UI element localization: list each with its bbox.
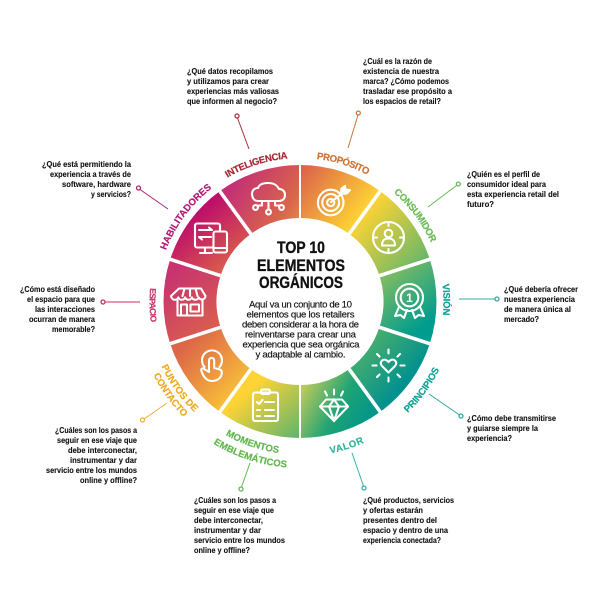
text block: Momentos emblemáticos question: instrumentar y dar: [194, 525, 262, 535]
text block: Consumidor question: esta experiencia retail del: [467, 189, 559, 199]
text block: Consumidor question: futuro?: [467, 199, 494, 209]
text block: center description: [242, 300, 360, 360]
text block: Habilitadores question: software, hardware: [62, 179, 131, 189]
text block: Valor question: presentes dentro del: [363, 515, 437, 525]
segment: Propósito: [300, 165, 380, 234]
text block: Momentos emblemáticos question: seguir en ese viaje que: [194, 505, 274, 515]
connector: Visión: [459, 297, 499, 301]
text block: Puntos de contacto question: online y offline?: [80, 475, 137, 485]
icon: award medal: 1: [406, 291, 413, 305]
panel: organic elements ring: [164, 164, 436, 439]
text block: Puntos de contacto question: debe interconectar,: [68, 445, 137, 455]
text block: Inteligencia question: y utilizamos para crear: [187, 76, 270, 86]
text block: Espacio question: [20, 284, 95, 334]
segment: Espacio: [164, 259, 221, 344]
label: Espacio: ESPACIO: [149, 288, 157, 322]
segment: Habilitadores: [170, 191, 251, 276]
text block: Principios question: [467, 413, 556, 443]
connector: Principios: [429, 394, 463, 418]
heading: center title: TOP 10: [277, 238, 325, 257]
text block: Puntos de contacto question: ¿Cuáles son los pasos a: [55, 425, 137, 435]
text block: Valor question: ¿Qué productos, servicios: [363, 495, 454, 505]
label: Valor: VALOR: [329, 437, 364, 454]
text block: Puntos de contacto question: seguir en ese viaje que: [57, 435, 137, 445]
text block: Propósito question: [363, 56, 452, 106]
text block: Propósito question: los espacios de retail?: [363, 96, 441, 106]
text block: Consumidor question: ¿Quién es el perfil de: [467, 169, 540, 179]
icon: heart with rays: [372, 350, 404, 382]
text block: Visión question: nuestra experiencia: [504, 294, 575, 304]
text block: Espacio question: ¿Cómo está diseñado: [20, 284, 95, 294]
heading: center title: ELEMENTOS: [257, 256, 345, 275]
icon: touch hand: [201, 350, 222, 381]
segment: Inteligencia: [220, 165, 300, 234]
label: Puntos de contacto: CONTACTO: [154, 373, 188, 416]
text block: Visión question: mercado?: [504, 314, 539, 324]
text block: Momentos emblemáticos question: ¿Cuáles son los pasos a: [194, 495, 276, 505]
text block: Habilitadores question: experiencia a través de: [50, 169, 131, 179]
label: Momentos emblemáticos: EMBLEMÁTICOS: [214, 438, 287, 468]
label: Principios: PRINCIPIOS: [403, 367, 438, 413]
text block: Inteligencia question: experiencias más valiosas: [187, 86, 279, 96]
text block: Inteligencia question: [187, 66, 279, 106]
text block: center description: y adaptable al cambio.: [256, 350, 346, 360]
text block: Momentos emblemáticos question: debe interconectar,: [194, 515, 263, 525]
icon: cloud network: [252, 183, 285, 214]
text block: center description: experiencia que sea orgánica: [242, 340, 360, 350]
connector: Momentos emblemáticos: [239, 463, 250, 491]
text block: Consumidor question: [467, 169, 559, 209]
text block: Propósito question: trasladar ese propósito a: [363, 86, 452, 96]
text block: Espacio question: ocurran de manera: [29, 314, 95, 324]
text block: Principios question: ¿Cómo debe transmitirse: [467, 413, 556, 423]
text block: Puntos de contacto question: servicio entre los mundos: [46, 465, 137, 475]
label: Inteligencia: INTELIGENCIA: [224, 152, 288, 178]
text block: Habilitadores question: ¿Qué está permitiendo la: [42, 159, 131, 169]
text block: Valor question: y ofertas estarán: [363, 505, 423, 515]
label: Puntos de contacto: PUNTOS DE: [162, 364, 199, 412]
segment: Momentos emblemáticos: [220, 369, 300, 438]
text block: Puntos de contacto question: [46, 425, 138, 485]
text block: Habilitadores question: y servicios?: [91, 189, 131, 199]
text block: Habilitadores question: [42, 159, 131, 199]
icon: clipboard checklist: [253, 390, 278, 421]
text block: Consumidor question: consumidor ideal para: [467, 179, 546, 189]
icon: connected devices: [195, 224, 227, 253]
text block: center description: deben considerar a la hora de: [242, 320, 359, 330]
text block: Visión question: ¿Qué debería ofrecer: [504, 284, 579, 294]
text block: Principios question: experiencia?: [467, 433, 512, 443]
segment: Principios: [349, 327, 430, 412]
connector: Valor: [352, 453, 366, 490]
text block: Momentos emblemáticos question: online y offline?: [194, 545, 250, 555]
text block: Propósito question: ¿Cuál es la razón de: [363, 56, 432, 66]
text block: Puntos de contacto question: instrumentar y dar: [70, 455, 138, 465]
label: Habilitadores: HABILITADORES: [160, 184, 211, 250]
connector: Habilitadores: [136, 186, 168, 209]
segment: Puntos de contacto: [170, 327, 251, 412]
text block: center description: reinventarse para crear una: [245, 330, 357, 340]
label: Consumidor: CONSUMIDOR: [395, 189, 436, 243]
text block: Valor question: espacio y dentro de una: [363, 525, 448, 535]
text block: center description: elementos que los retailers: [246, 310, 355, 320]
text block: Principios question: y guiarse siempre la: [467, 423, 538, 433]
text block: Inteligencia question: que informen al negocio?: [187, 96, 277, 106]
text block: Valor question: [363, 495, 454, 545]
heading: center title: [257, 238, 345, 292]
text block: Espacio question: memorable?: [52, 324, 95, 334]
text block: Espacio question: las interacciones: [35, 304, 95, 314]
connector: Espacio: [101, 300, 140, 304]
text block: Inteligencia question: ¿Qué datos recopilamos: [187, 66, 273, 76]
text block: Valor question: experiencia conectada?: [363, 535, 441, 545]
text block: Propósito question: marca? ¿Cómo podemos: [363, 76, 449, 86]
heading: center title: ORGÁNICOS: [259, 273, 343, 292]
icon: consumer crosshair: [373, 222, 404, 253]
icon: diamond: [320, 390, 348, 421]
text block: Espacio question: el espacio para que: [27, 294, 95, 304]
connector: Consumidor: [428, 182, 460, 207]
icon: storefront: [171, 288, 206, 316]
connector: Puntos de contacto: [140, 403, 167, 422]
segment: Consumidor: [349, 191, 430, 276]
text block: Momentos emblemáticos question: [194, 495, 285, 555]
text block: Momentos emblemáticos question: servicio entre los mundos: [194, 535, 285, 545]
segment: Valor: [300, 369, 380, 438]
label: Visión: VISIÓN: [442, 283, 452, 316]
icon: award medal: [395, 284, 424, 318]
connector: Propósito: [348, 111, 360, 148]
label: Propósito: PROPÓSITO: [317, 152, 370, 174]
segment: Visión: [379, 259, 436, 344]
text block: center description: Aquí va un conjunto de 10: [249, 300, 352, 310]
icon: target: [318, 186, 350, 215]
text block: Visión question: de manera única al: [504, 304, 571, 314]
text block: Visión question: [504, 284, 579, 324]
label: Momentos emblemáticos: MOMENTOS: [226, 430, 279, 453]
connector: Inteligencia: [235, 114, 249, 149]
text block: Propósito question: existencia de nuestra: [363, 66, 439, 76]
